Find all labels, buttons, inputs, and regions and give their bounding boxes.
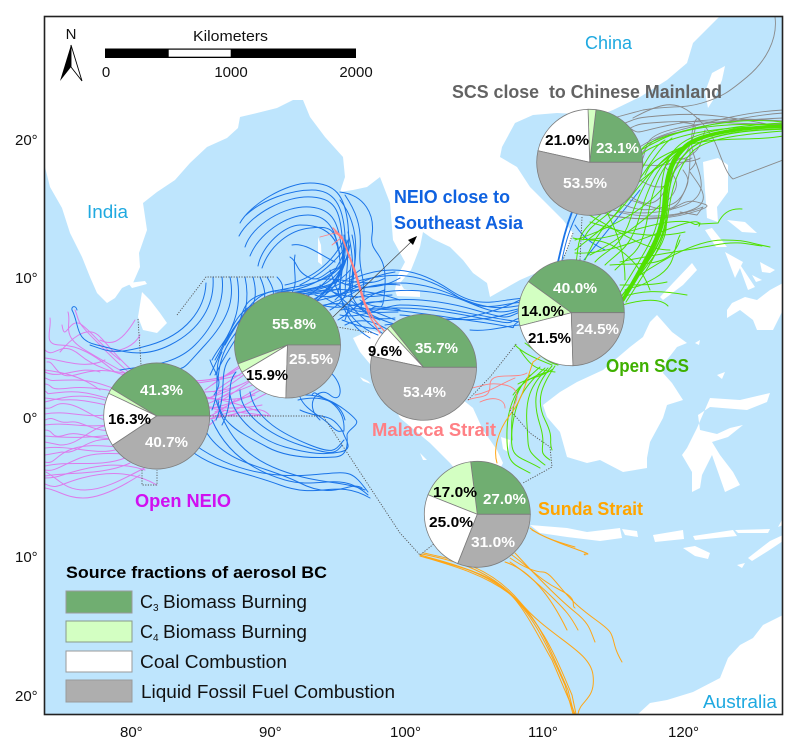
scale bar: Kilometers — [193, 28, 268, 45]
trajectories: Open NEIO (magenta) — [45, 310, 285, 498]
value: 35.7%: 35.7% — [415, 340, 458, 357]
slice: C3 biomass burning — [528, 260, 624, 313]
slice: C4 biomass burning — [387, 326, 424, 367]
trajectories: SCS close to Chinese Mainland (gray) — [600, 17, 783, 219]
trajectories: Malacca Strait (pink) — [320, 228, 527, 410]
region label: Open NEIO: Open NEIO — [135, 491, 231, 511]
slice: C4 biomass burning — [109, 388, 157, 416]
dotted region boundaries — [138, 217, 582, 555]
scale bar: 2000 — [339, 64, 373, 81]
legend item: coal combustion — [66, 651, 287, 672]
land: Java — [530, 525, 622, 541]
region label: NEIO close to Southeast Asia: NEIO close to — [394, 187, 510, 207]
legend item: C4 biomass burning: Biomass Burning — [163, 622, 307, 642]
latitude axis labels: 0° — [23, 410, 37, 427]
land: Borneo — [543, 315, 687, 472]
legend title: Source fractions of aerosol BC — [66, 563, 327, 582]
scale bar: 1000 — [214, 64, 248, 81]
pie: Malacca Strait — [368, 314, 476, 420]
trajectories: NEIO close to Southeast Asia (blue) — [72, 183, 640, 498]
region label: Sunda Strait: Sunda Strait — [538, 499, 643, 519]
slice: coal combustion — [538, 109, 590, 162]
legend item: C3 biomass burning — [66, 591, 307, 614]
value: 27.0%: 27.0% — [483, 491, 526, 508]
legend item: C4 biomass burning: 4 — [153, 633, 159, 644]
slice: liquid fossil fuel — [370, 356, 476, 420]
trajectories: Open SCS (green) — [507, 121, 783, 473]
region label: NEIO close to Southeast Asia: Southeast Asia — [394, 213, 524, 233]
value: 31.0%: 31.0% — [471, 534, 515, 551]
value: 53.4%: 53.4% — [403, 384, 446, 401]
arrow: NEIO close to Southeast Asia pointer — [333, 236, 417, 317]
latitude axis labels — [15, 132, 38, 705]
pie: SCS close to Chinese Mainland — [537, 109, 643, 215]
value: 41.3%: 41.3% — [140, 382, 183, 399]
longitude axis labels: 90° — [259, 724, 282, 741]
value: 25.5%: 25.5% — [289, 351, 333, 368]
legend item: C4 biomass burning — [66, 621, 307, 644]
value: 25.0%: 25.0% — [429, 514, 473, 531]
value: 24.5%: 24.5% — [576, 321, 619, 338]
value: 40.7%: 40.7% — [145, 434, 188, 451]
land: Visayas — [705, 220, 775, 290]
country label: India: India — [87, 202, 129, 222]
value: 9.6%: 9.6% — [368, 343, 402, 360]
slice: coal combustion — [372, 329, 424, 367]
value: 40.0%: 40.0% — [553, 280, 597, 297]
value: 17.0%: 17.0% — [433, 484, 477, 501]
country label: China: China — [585, 33, 633, 53]
pie: Open NEIO — [104, 363, 210, 469]
land: Lesser Sunda islands — [622, 520, 783, 568]
value: 23.1%: 23.1% — [596, 140, 639, 157]
longitude axis labels — [120, 724, 699, 741]
latitude axis labels: 20° — [15, 688, 38, 705]
country label: Australia: Australia — [703, 692, 778, 712]
slice: coal combustion — [104, 393, 157, 445]
land: Sumatra — [353, 330, 503, 475]
legend item: C3 biomass burning: 3 — [153, 603, 159, 614]
legend item: liquid fossil fuel combustion — [66, 680, 395, 702]
region label: NEIO close to Southeast Asia — [394, 187, 524, 233]
longitude axis labels: 80° — [120, 724, 143, 741]
scale bar: 0 — [102, 64, 110, 81]
slice: coal combustion — [424, 495, 477, 564]
value: 21.5%: 21.5% — [528, 330, 571, 347]
slice: C3 biomass burning — [471, 461, 530, 514]
value: 21.0%: 21.0% — [545, 132, 589, 149]
pie: NEIO close to Southeast Asia — [235, 292, 340, 398]
slice: liquid fossil fuel — [286, 345, 340, 398]
land: Sulawesi — [682, 393, 770, 492]
latitude axis labels: 20° — [15, 132, 38, 149]
slice: liquid fossil fuel — [112, 416, 210, 469]
region label: SCS close to Chinese Mainland: SCS close to Chinese Mainland — [452, 82, 722, 102]
legend item: coal combustion: Coal Combustion — [140, 652, 287, 672]
legend item: liquid fossil fuel combustion: Liquid Fossil Fuel Combustion — [141, 682, 395, 702]
longitude axis labels: 110° — [528, 724, 558, 741]
slice: C4 biomass burning — [518, 282, 571, 326]
region label: Malacca Strait: Malacca Strait — [372, 420, 496, 440]
latitude axis labels: 10° — [15, 270, 38, 287]
trajectories: Sunda Strait (orange) — [420, 357, 622, 714]
land: Australia — [637, 615, 783, 715]
region label: Open SCS: Open SCS — [606, 356, 689, 376]
scale bar — [102, 28, 373, 81]
longitude axis labels: 120° — [668, 724, 699, 741]
value: 53.5%: 53.5% — [563, 175, 607, 192]
legend item: C4 biomass burning: C — [140, 622, 153, 642]
icon: north arrow — [60, 26, 82, 81]
land: Taiwan — [705, 66, 725, 108]
slice: liquid fossil fuel — [571, 313, 624, 366]
land: Sri Lanka — [138, 292, 167, 333]
land: Luzon — [703, 158, 728, 222]
value: 15.9%: 15.9% — [246, 367, 288, 384]
slice: C3 biomass burning — [235, 292, 340, 364]
land: Palawan — [660, 263, 697, 300]
value: 16.3%: 16.3% — [108, 411, 151, 428]
slice: liquid fossil fuel — [458, 514, 530, 567]
legend item: C3 biomass burning: Biomass Burning — [163, 592, 307, 612]
slice: coal combustion — [520, 313, 573, 366]
slice: C4 biomass burning — [588, 109, 596, 162]
slice: C4 biomass burning — [428, 462, 477, 514]
land: small islands — [128, 237, 725, 460]
slice: C3 biomass burning — [590, 110, 643, 162]
pie: Sunda Strait — [424, 461, 530, 567]
legend item: C3 biomass burning: C — [140, 592, 153, 612]
land: Mindanao — [727, 283, 783, 330]
latitude axis labels: 10° — [15, 549, 38, 566]
slice: coal combustion — [242, 345, 288, 398]
slice: C4 biomass burning — [238, 345, 288, 372]
slice: C3 biomass burning — [391, 314, 476, 367]
longitude axis labels: 100° — [390, 724, 421, 741]
slice: C3 biomass burning — [111, 363, 210, 416]
value: 55.8%: 55.8% — [272, 316, 316, 333]
legend: source fractions of aerosol BC — [66, 563, 395, 702]
value: 14.0%: 14.0% — [521, 303, 564, 320]
pie: Open SCS — [518, 260, 624, 366]
land: Asian mainland — [44, 16, 720, 303]
slice: liquid fossil fuel — [537, 151, 643, 215]
icon: north arrow: N — [66, 26, 76, 43]
